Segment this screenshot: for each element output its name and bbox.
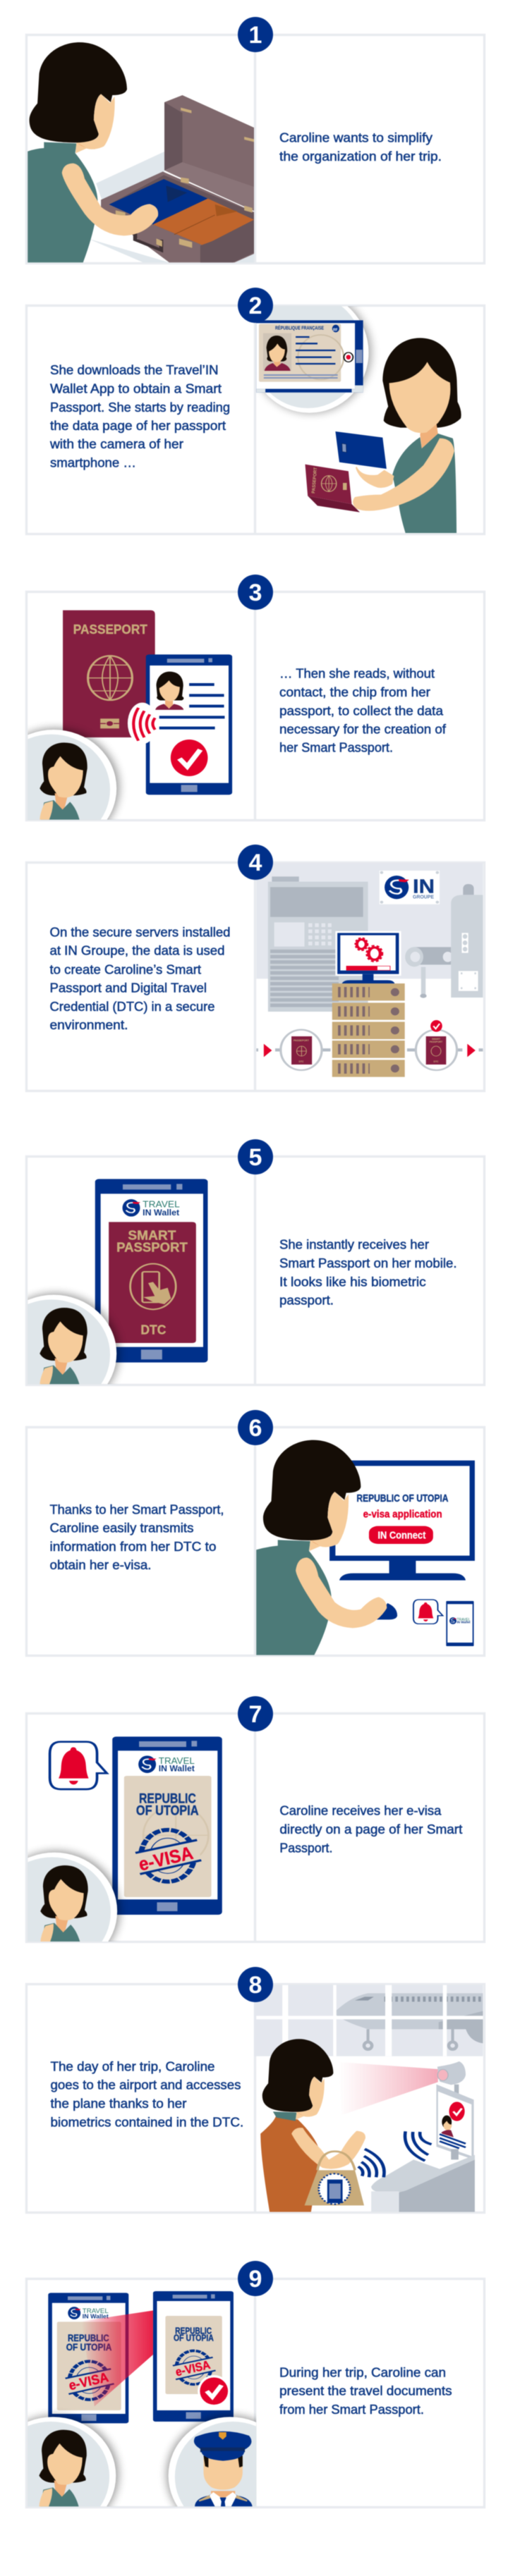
illustration: phone showing e-visa: OF UTOPIA [136,1803,199,1818]
panel frame [27,1156,484,1386]
illustration: Caroline scanning passport with phone [250,292,461,533]
badge 9: 9 [249,2266,262,2293]
panel frame [27,1713,484,1943]
illustration: presenting documents to an officer: OF UTOPIA [174,2333,214,2343]
badge 4: 4 [249,850,262,876]
illustration: Caroline at the computer [247,1440,475,1656]
text: step 6 [49,1502,224,1572]
illustration: passport, phone and NFC: PASSEPORT [73,622,147,637]
badge 5: 5 [249,1144,262,1171]
text: step 3: passport, to collect the data [279,704,444,718]
text: step 9: from her Smart Passport. [279,2403,424,2417]
badge 1: 1 [249,22,262,49]
text: step 2: with the camera of her [49,437,183,451]
text: step 9: During her trip, Caroline can [279,2365,446,2379]
text: step 7: directly on a page of her Smart [279,1822,462,1836]
badge 7 [238,1696,273,1731]
panel frame [27,305,484,534]
badge 3: 3 [249,579,262,606]
illustration: phone with Smart Passport: PASSPORT [116,1241,188,1255]
illustration: presenting documents to an officer: OF UTOPIA [66,2341,111,2353]
illustration: phone showing e-visa: TRAVEL [159,1755,195,1766]
text: step 1 [279,131,442,164]
panel 5: Smart Passport received [25,1139,485,1386]
illustration: production line with servers: IN [413,876,435,897]
text: step 3: … Then she reads, without [279,667,435,681]
panel 2: reading the data page [27,288,484,534]
badge 9 [238,2261,273,2296]
panel frame [27,1984,484,2214]
illustration: production line with servers: PASSPORT [430,1041,443,1043]
panel 4: secure servers [27,845,484,1092]
text: step 3: contact, the chip from her [279,685,430,699]
text: step 4: environment. [49,1018,128,1032]
text: step 8: goes to the airport and accesses [51,2078,241,2092]
illustration: Caroline at the computer: e-visa application [363,1508,442,1520]
illustration: presenting documents to an officer: TRAVEL [83,2307,109,2315]
text: step 2: Passport. She starts by reading [50,400,230,415]
illustration: phone showing e-visa: IN Wallet [159,1764,195,1774]
panel frame [27,862,484,1092]
illustration: phone with Smart Passport: TRAVEL [143,1199,180,1210]
text: step 2: Wallet App to obtain a Smart [50,381,222,395]
text: step 1: the organization of her trip. [279,149,442,164]
illustration: Caroline at the computer: TRAVEL [457,1618,471,1622]
text: step 5: She instantly receives her [279,1238,429,1252]
badge 5 [238,1139,273,1174]
illustration: Caroline at the computer: IN Wallet [457,1621,471,1624]
text: step 5: It looks like his biometric [279,1275,426,1289]
text: step 8 [51,2059,243,2129]
panel frame [27,35,484,264]
illustration: Caroline packing a suitcase [20,42,254,262]
panel 6: e-visa application [27,1410,484,1657]
text: step 7 [279,1804,462,1855]
illustration: Caroline scanning passport with phone: RF [333,329,338,333]
text: step 4 [49,925,230,1032]
illustration: phone showing e-visa: e-VISA [137,1842,195,1875]
illustration: presenting documents to an officer [0,2291,294,2534]
text: step 4: at IN Groupe, the data is used [49,944,224,958]
badge 8 [238,1967,273,2002]
illustration: passport, phone and NFC [27,609,233,821]
panel 7: e-visa received [25,1695,485,1943]
illustration: presenting documents to an officer: REPUBLIC [68,2332,109,2343]
panel 9: during the trip [25,2260,485,2508]
badge 2: 2 [249,293,262,319]
text: step 1: Caroline wants to simplify [279,131,433,145]
text: step 8: The day of her trip, Caroline [51,2059,214,2073]
badge 2 [238,288,273,323]
panel 1: suitcase [20,17,485,264]
badge 3 [238,575,273,610]
text: step 2: She downloads the Travel’IN [50,363,219,377]
illustration: presenting documents to an officer: e-VISA [174,2358,212,2379]
illustration: presenting documents to an officer: e-VISA [68,2370,110,2393]
text: step 3: her Smart Passport. [279,741,393,755]
text: step 6: information from her DTC to [49,1540,216,1554]
illustration: production line with servers [256,862,483,1077]
badge 6: 6 [249,1415,262,1442]
illustration: phone showing e-visa: REPUBLIC [139,1791,196,1806]
illustration: phone with Smart Passport: IN Wallet [143,1208,179,1218]
illustration: biometric gate at the airport [254,1985,483,2212]
illustration: production line with servers: DTC [434,1060,439,1063]
illustration: presenting documents to an officer: REPUBLIC [175,2325,212,2336]
illustration: phone with Smart Passport [0,1179,207,1412]
illustration: production line with servers: DTC [299,1060,304,1063]
text: step 2: smartphone … [50,456,136,470]
panel 3: reading the chip [25,574,485,822]
illustration: production line with servers: GROUPE [413,894,434,900]
text: step 9 [279,2365,452,2417]
text: step 9: present the travel documents [279,2384,452,2398]
illustration: Caroline at the computer: IN Connect [377,1530,425,1542]
illustration: presenting documents to an officer: IN Wallet [83,2312,109,2319]
panel 8: at the airport [27,1967,484,2214]
text: step 4: On the secure servers installed [49,925,230,939]
badge 4 [238,845,273,880]
text: step 3: necessary for the creation of [279,723,447,737]
text: step 2: the data page of her passport [50,419,226,433]
illustration: phone with Smart Passport: DTC [140,1323,166,1337]
text: step 6: obtain her e-visa. [49,1558,151,1572]
badge 6 [238,1410,273,1445]
text: step 6: Thanks to her Smart Passport, [49,1502,224,1516]
text: step 2 [49,363,230,470]
text: step 7: Passport. [279,1841,332,1855]
illustration: production line with servers: SMART [432,1038,441,1041]
illustration: phone showing e-visa [27,1736,223,1942]
badge 8: 8 [249,1972,262,1999]
text: step 4: Credential (DTC) in a secure [49,1000,214,1014]
illustration: phone with Smart Passport: SMART [128,1228,176,1242]
panel frame [27,591,484,821]
text: step 5: Smart Passport on her mobile. [279,1256,457,1270]
illustration: Caroline scanning passport with phone: PASSEPORT [311,467,318,493]
text: step 8: biometrics contained in the DTC. [51,2115,243,2129]
text: step 6: Caroline easily transmits [49,1521,193,1535]
illustration: Caroline at the computer: REPUBLIC OF UTOPIA [356,1492,449,1504]
badge 7: 7 [249,1701,262,1728]
text: step 5 [279,1238,457,1308]
text: step 5: passport. [279,1294,334,1308]
text: step 4: Passport and Digital Travel [49,981,207,995]
illustration: production line with servers: PASSEPORT [294,1039,310,1042]
text: step 4: to create Caroline’s Smart [49,962,201,976]
panel frame [27,2278,484,2508]
text: step 3 [279,667,447,755]
illustration: Caroline scanning passport with phone: RÉPUBLIQUE FRANÇAISE [275,325,324,331]
panel frame [27,1427,484,1657]
text: step 8: the plane thanks to her [51,2097,186,2111]
badge 1 [238,17,273,52]
text: step 7: Caroline receives her e-visa [279,1804,442,1818]
